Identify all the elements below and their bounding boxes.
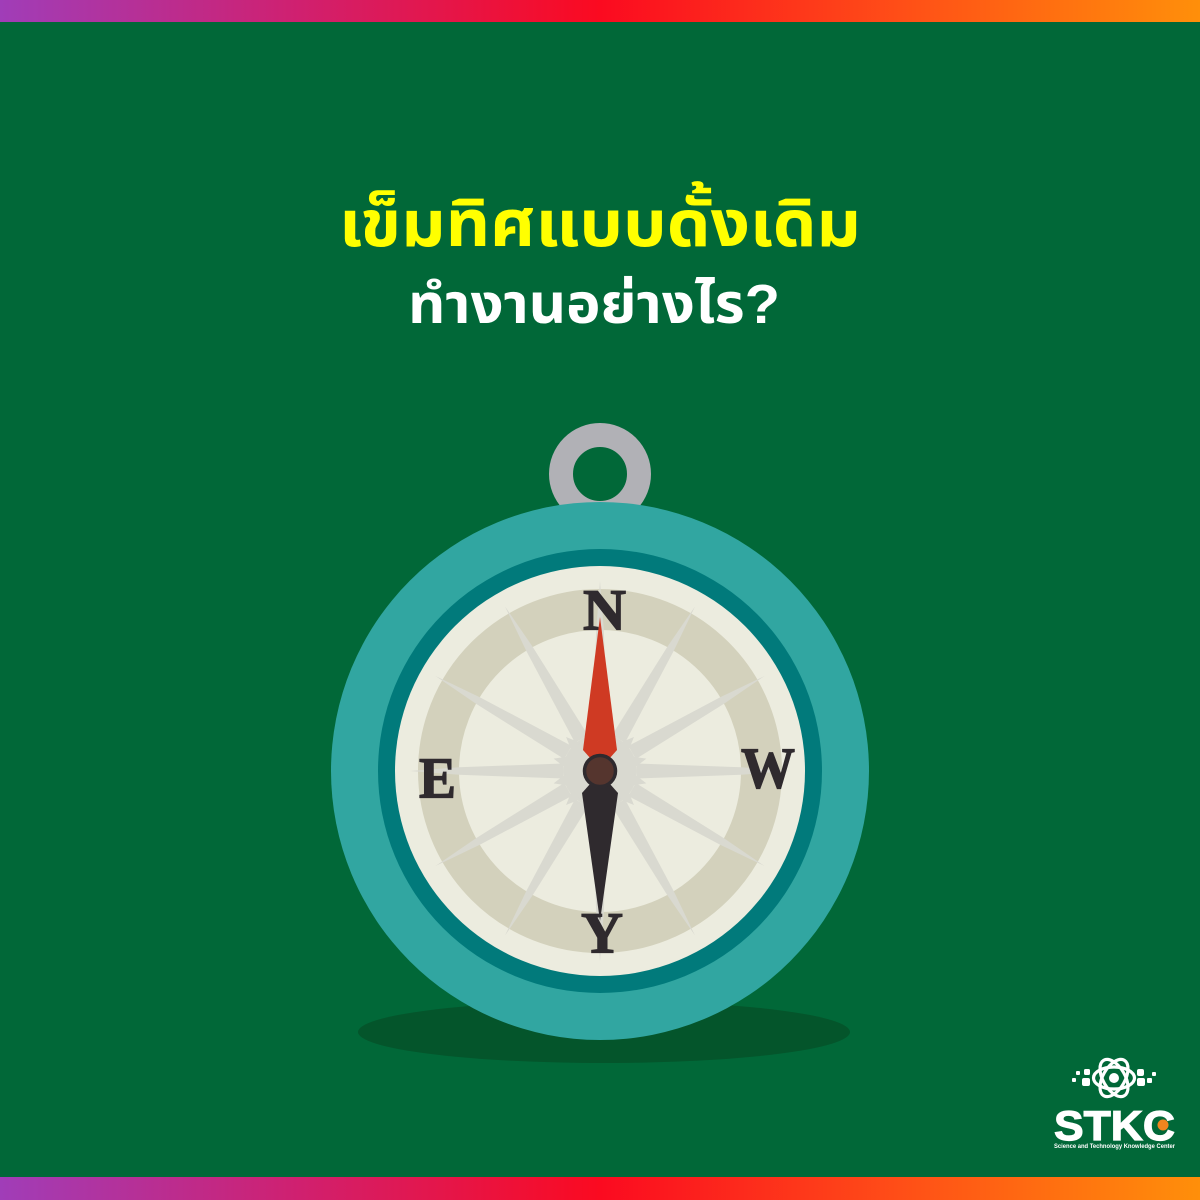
red needle xyxy=(583,617,617,759)
top gradient bar xyxy=(0,0,1200,22)
letter Y: Y xyxy=(581,900,623,966)
logo: STKC xyxy=(1054,1055,1176,1150)
inner case rim xyxy=(378,549,822,993)
title xyxy=(339,180,861,335)
compass illustration xyxy=(331,435,869,1063)
logo tagline: Science and Technology Knowledge Center xyxy=(1054,1144,1176,1150)
ground shadow xyxy=(358,1001,850,1063)
letter E: E xyxy=(419,746,456,810)
outer case xyxy=(331,502,869,1040)
letter W: W xyxy=(741,736,795,800)
letter N: N xyxy=(583,578,626,642)
needle pivot xyxy=(584,756,616,786)
logo wordmark: STKC xyxy=(1054,1102,1175,1149)
logo orange dot xyxy=(1158,1120,1168,1130)
dial face xyxy=(395,566,805,976)
title line 2: ทำงานอย่างไร? xyxy=(408,273,780,335)
bottom gradient bar xyxy=(0,1177,1200,1200)
title line 1: เข็มทิศแบบดั้งเดิม xyxy=(339,180,861,260)
dial band xyxy=(438,610,762,932)
hanging ring xyxy=(561,435,639,513)
logo atom emblem xyxy=(1094,1055,1134,1101)
compass rose xyxy=(410,581,790,961)
logo dots xyxy=(1072,1069,1156,1086)
direction letters xyxy=(419,578,795,966)
black needle xyxy=(582,784,618,921)
